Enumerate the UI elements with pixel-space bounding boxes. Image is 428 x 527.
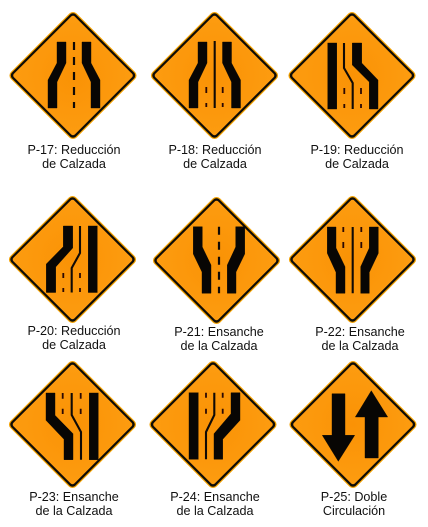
caption: Circulación	[323, 504, 385, 518]
sign P-24	[147, 359, 279, 518]
caption: P-24: Ensanche	[170, 490, 260, 504]
road edges	[193, 227, 245, 293]
diamond panel	[286, 10, 418, 141]
caption: P-17: Reducción	[27, 143, 121, 157]
road edges	[46, 226, 97, 292]
caption: de la Calzada	[321, 339, 399, 353]
caption: P-25: Doble	[321, 490, 387, 504]
caption: de la Calzada	[35, 504, 113, 518]
diamond panel	[287, 194, 418, 325]
caption: de Calzada	[42, 157, 106, 171]
diamond panel	[7, 10, 139, 141]
caption: P-18: Reducción	[168, 143, 262, 157]
diamond panel	[149, 10, 280, 141]
road edges	[327, 227, 378, 293]
diamond panel	[151, 195, 282, 326]
arrow: up	[355, 391, 388, 458]
caption: de Calzada	[42, 338, 106, 352]
lane dashes	[206, 87, 223, 107]
lane dashes	[63, 393, 81, 414]
sign P-17	[7, 10, 139, 171]
dashed centre line	[218, 227, 220, 293]
diamond panel	[7, 194, 138, 325]
sign P-23	[7, 359, 138, 518]
road edges	[48, 42, 100, 108]
dashed centre line	[73, 42, 75, 108]
sign P-21	[151, 195, 282, 353]
lane dashes	[344, 88, 361, 108]
widening line	[72, 393, 81, 460]
solid centre line	[352, 227, 354, 293]
diamond panel	[7, 359, 138, 490]
sign P-20	[7, 194, 138, 352]
sign P-22	[287, 194, 418, 353]
lane dashes	[63, 273, 80, 292]
sign P-25	[287, 359, 419, 518]
caption: P-22: Ensanche	[315, 325, 405, 339]
merging line	[344, 43, 353, 109]
road edges	[46, 393, 98, 460]
diamond panel	[147, 359, 279, 490]
merging line	[72, 226, 80, 292]
caption: de Calzada	[325, 157, 389, 171]
caption: P-19: Reducción	[310, 143, 404, 157]
sign P-19	[286, 10, 418, 171]
sign P-18	[149, 10, 280, 171]
caption: de la Calzada	[180, 339, 258, 353]
diamond panel	[287, 359, 419, 490]
caption: P-20: Reducción	[27, 324, 121, 338]
caption: de la Calzada	[176, 504, 254, 518]
road edges	[328, 43, 378, 109]
caption: P-23: Ensanche	[29, 490, 119, 504]
road edges	[189, 42, 240, 108]
road edges	[189, 393, 240, 459]
solid centre line	[214, 41, 216, 108]
caption: de Calzada	[183, 157, 247, 171]
lane dashes	[343, 227, 361, 248]
lane dashes	[206, 393, 223, 414]
widening line	[206, 393, 214, 459]
caption: P-21: Ensanche	[174, 325, 264, 339]
arrow: down	[322, 394, 355, 461]
